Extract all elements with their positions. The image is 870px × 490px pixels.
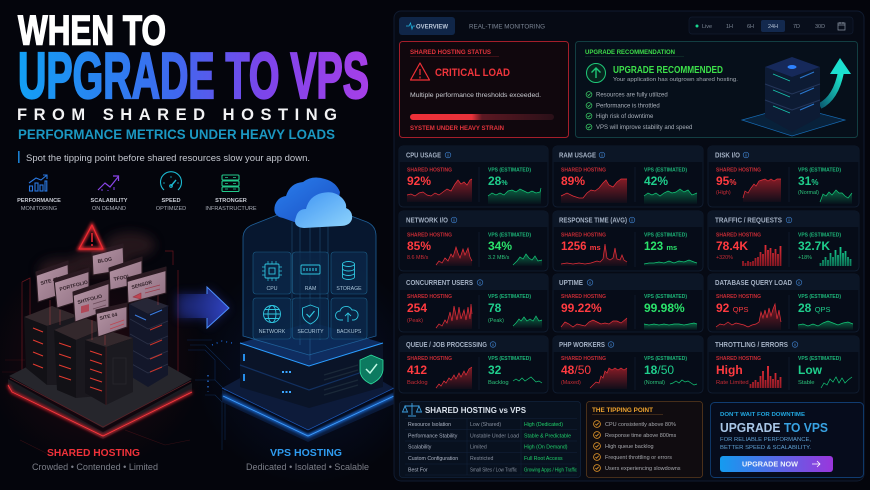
comparison table: Custom Configuration (408, 456, 458, 462)
card: disk i/o: 95% (716, 174, 736, 188)
label: vps hosting: Dedicated • Isolated • Scalable (246, 462, 369, 472)
comparison table: Limited (470, 444, 487, 450)
comparison table: Unstable Under Load (470, 434, 519, 440)
card: uptime (553, 274, 703, 332)
card: traffic / requests: TRAFFIC / REQUESTS (715, 216, 782, 224)
card: database query load (708, 274, 859, 332)
card: cpu usage: 28% (488, 174, 508, 188)
dashboard panel (394, 11, 864, 481)
panel: upgrade recommendation: Your application has outgrown shared hosting. (613, 77, 738, 83)
card: queue / job processing: Backlog (488, 380, 509, 386)
tab: real-time monitoring: REAL-TIME MONITORING (469, 24, 545, 30)
panel: call to action: UPGRADE TO VPS (720, 420, 828, 435)
card: traffic / requests: 78.4K (716, 239, 748, 253)
arrow: shared to vps (177, 287, 229, 328)
card: cpu usage: 92% (407, 174, 431, 188)
time range selector: Live (702, 24, 712, 30)
button: upgrade now (720, 456, 833, 472)
card: database query load: 28 QPS (798, 301, 831, 315)
icon: scales (402, 403, 422, 416)
time range selector: 30D (815, 24, 825, 30)
card: database query load: VPS (ESTIMATED) (798, 294, 841, 300)
time range selector: 1H (726, 24, 733, 30)
connector lines (50, 280, 158, 345)
comparison table: Performance Stability (408, 434, 458, 440)
card: ram usage: VPS (ESTIMATED) (644, 168, 687, 174)
resource labels: SECURITY (297, 329, 324, 335)
resource cards (253, 252, 367, 339)
icon: security (302, 305, 318, 324)
card: network i/o: 34% (488, 239, 512, 253)
card: ram usage: RAM USAGE (559, 150, 596, 160)
card: concurrent users: 78 (488, 301, 502, 315)
card: network i/o: VPS (ESTIMATED) (488, 232, 531, 238)
card: disk i/o: SHARED HOSTING (716, 168, 761, 174)
tower 4 blue stacked (129, 298, 169, 387)
tower 2 (54, 318, 110, 398)
resource labels: STORAGE (336, 286, 362, 292)
card: response time: VPS (ESTIMATED) (644, 232, 687, 238)
comparison table: Low (Shared) (470, 422, 501, 428)
card: traffic / requests: 32.7K (798, 239, 830, 253)
feature: speed (156, 172, 186, 212)
panel: shared hosting status: CRITICAL LOAD (435, 67, 510, 79)
card: throttling / errors: High (716, 363, 743, 377)
card: disk i/o: DISK I/O (715, 150, 740, 160)
icon: warning triangle (79, 225, 103, 249)
panel: the tipping point: THE TIPPING POINT (592, 407, 653, 414)
time range selector: 7D (793, 24, 800, 30)
checklist: High queue backlog (605, 444, 654, 450)
shared hosting server illustration (8, 225, 192, 439)
subtitle: from shared hosting: FROM SHARED HOSTING (17, 106, 337, 124)
card: network i/o: SHARED HOSTING (407, 232, 452, 238)
card: throttling / errors: VPS (ESTIMATED) (798, 356, 841, 362)
card: cpu usage (399, 146, 548, 207)
comparison table: Scalability (408, 444, 432, 450)
card: ram usage (553, 146, 703, 207)
card: php workers: (Normal) (644, 380, 665, 386)
checklist: Performance is throttled (596, 104, 660, 110)
card: ram usage: SHARED HOSTING (561, 168, 606, 174)
panel: upgrade recommendation: UPGRADE RECOMMENDED (613, 65, 723, 76)
label: shared hosting: Crowded • Contended • Limited (32, 462, 158, 472)
card: php workers: SHARED HOSTING (561, 356, 606, 362)
card: disk i/o: VPS (ESTIMATED) (798, 168, 841, 174)
progress bar (410, 114, 554, 120)
card: concurrent users: 254 (407, 301, 427, 315)
card: concurrent users: (Peak) (488, 318, 504, 324)
icon: server stack (222, 175, 239, 192)
feature: scalability: SCALABILITY (91, 198, 128, 204)
card: throttling / errors: Rate Limited (716, 380, 749, 386)
panel: shared hosting vs vps: SHARED HOSTING vs VPS (425, 405, 526, 415)
card: php workers: (Maxed) (561, 380, 581, 386)
card: traffic / requests: VPS (ESTIMATED) (798, 232, 841, 238)
panel: shared hosting status: Multiple performance thresholds exceeded. (410, 92, 541, 99)
card: php workers: VPS (ESTIMATED) (644, 356, 687, 362)
icon: rising arrow (98, 176, 118, 191)
card: database query load: 92 QPS (716, 301, 749, 315)
comparison table: Best For (408, 468, 428, 474)
card: response time: SHARED HOSTING (561, 232, 606, 238)
card: concurrent users: CONCURRENT USERS (406, 278, 473, 287)
checklist: Frequent throttling or errors (605, 455, 672, 461)
website windows: SENSOR (131, 280, 153, 291)
checklist: Users experiencing slowdowns (605, 466, 681, 472)
card: queue / job processing: VPS (ESTIMATED) (488, 356, 531, 362)
panel: shared hosting status: SYSTEM UNDER HEAVY STRAIN (410, 126, 504, 132)
title: when to: WHEN TO (18, 6, 166, 54)
title: upgrade to vps: UPGRADE TO VPS (18, 40, 369, 112)
card: response time: 123 ms (644, 241, 677, 253)
resource labels: CPU (267, 286, 278, 292)
card: queue / job processing (399, 336, 548, 393)
server stack illustration (742, 57, 851, 136)
server box (240, 322, 383, 408)
platform (222, 366, 394, 442)
tab: overview: OVERVIEW (416, 24, 449, 30)
card: cpu usage: SHARED HOSTING (407, 168, 452, 174)
icon: bar chart trend (29, 175, 47, 191)
card: network i/o (399, 211, 548, 271)
checklist (586, 92, 692, 131)
card: database query load: DATABASE QUERY LOAD (715, 278, 792, 287)
icon: network (264, 306, 280, 322)
feature: infrastructure: INFRASTRUCTURE (205, 206, 257, 212)
tab: overview (399, 17, 455, 35)
card: disk i/o: (Normal) (798, 190, 819, 196)
panel: call to action: DON'T WAIT FOR DOWNTIME (720, 412, 805, 418)
tower 1 (24, 306, 78, 385)
label: vps hosting: VPS HOSTING (270, 447, 342, 459)
comparison table: High (Dedicated) (524, 422, 563, 428)
panel: call to action: BETTER SPEED & SCALABILITY. (720, 445, 811, 451)
website windows: SITE 04 (99, 312, 118, 322)
card: disk i/o: 31% (798, 174, 818, 188)
glass panel (243, 210, 376, 360)
card: php workers (553, 336, 703, 393)
time range selector: 6H (747, 24, 754, 30)
comparison table (405, 418, 577, 475)
subtitle: performance metrics: PERFORMANCE METRICS UNDER HEAVY LOADS (18, 127, 335, 142)
feature: scalability (91, 176, 128, 212)
card: concurrent users (399, 274, 548, 332)
checklist: High risk of downtime (596, 114, 654, 120)
ghost enclosure outline (22, 251, 178, 380)
card: ram usage: 42% (644, 174, 668, 188)
card: throttling / errors: THROTTLING / ERRORS (715, 340, 788, 349)
card: concurrent users: VPS (ESTIMATED) (488, 294, 531, 300)
comparison table: Restricted (470, 456, 493, 462)
card: concurrent users: (Peak) (407, 318, 423, 324)
card: queue / job processing: 412 (407, 363, 427, 377)
card: php workers: PHP WORKERS (559, 340, 605, 349)
card: network i/o: 85% (407, 239, 431, 253)
feature: infrastructure (205, 175, 257, 212)
checklist: Resources are fully utilized (596, 92, 668, 98)
icon: warning (410, 63, 430, 80)
panel: upgrade recommendation (576, 42, 858, 138)
icon: cpu (262, 261, 282, 281)
label: shared hosting: SHARED HOSTING (47, 447, 140, 459)
card: php workers: 18/50 (644, 363, 674, 377)
panel: call to action: FOR RELIABLE PERFORMANCE, (720, 437, 811, 443)
card: queue / job processing: Backlog (407, 380, 428, 386)
feature: performance monitoring (17, 175, 61, 212)
comparison table: Stable & Predictable (524, 434, 571, 440)
card: throttling / errors (708, 336, 859, 393)
website windows: PORTFOLIO (59, 280, 89, 293)
resource labels: BACKUPS (337, 329, 362, 335)
icon: storage (342, 262, 354, 280)
comparison table: High (On Demand) (524, 444, 568, 450)
icon: ram (301, 265, 320, 274)
circuit traces (2, 340, 232, 455)
website windows: SHTFOLIO (77, 294, 103, 306)
card: uptime: SHARED HOSTING (561, 294, 606, 300)
feature: speed: OPTIMIZED (156, 206, 186, 212)
card: throttling / errors: SHARED HOSTING (716, 356, 761, 362)
card: network i/o: 3.2 MB/s (488, 255, 510, 261)
icon: gauge (160, 172, 182, 190)
icon: green shield (360, 355, 383, 384)
card: network i/o: NETWORK I/O (406, 216, 448, 224)
time range selector: 24H (768, 24, 778, 30)
card: throttling / errors: Stable (798, 380, 814, 386)
card: disk i/o: (High) (716, 190, 731, 196)
panel: shared hosting vs vps (400, 402, 580, 478)
icon: backups (336, 306, 358, 322)
website windows: SITE 42 (40, 276, 59, 287)
panel: upgrade recommendation: UPGRADE RECOMMENDATION (585, 49, 676, 56)
icon: up arrow (586, 64, 606, 82)
comparison table: Full Root Access (524, 456, 563, 462)
card: traffic / requests: +320% (716, 255, 733, 261)
card: traffic / requests (708, 211, 859, 271)
card: ram usage: 89% (561, 174, 585, 188)
card: cpu usage: CPU USAGE (406, 150, 441, 160)
card: database query load: SHARED HOSTING (716, 294, 761, 300)
card: uptime: UPTIME (559, 278, 583, 287)
resource labels (259, 286, 362, 335)
comparison table: Resource Isolation (408, 422, 451, 428)
checklist (594, 421, 681, 472)
resource labels: RAM (305, 286, 316, 292)
card: queue / job processing: SHARED HOSTING (407, 356, 452, 362)
card: response time (553, 211, 703, 271)
card: queue / job processing: 32 (488, 363, 502, 377)
feature: infrastructure: STRONGER (215, 198, 247, 204)
panel: shared hosting status: SHARED HOSTING STATUS (410, 49, 491, 56)
tower 3 (85, 332, 133, 405)
resource labels: NETWORK (259, 329, 286, 335)
card: traffic / requests: +18% (798, 255, 812, 261)
card: cpu usage: VPS (ESTIMATED) (488, 168, 531, 174)
platform (8, 350, 192, 439)
panel: the tipping point (586, 402, 702, 478)
label: vps hosting (246, 447, 369, 472)
card: throttling / errors: Low (798, 363, 823, 377)
checklist: Response time above 800ms (605, 433, 676, 439)
card: php workers: 48/50 (561, 363, 591, 377)
vps hosting illustration (222, 178, 394, 442)
comparison table: Small Sites / Low Traffic (470, 468, 517, 474)
feature: scalability: ON DEMAND (92, 206, 126, 212)
card: uptime: 99.22% (561, 301, 602, 315)
cloud (274, 178, 352, 228)
card: uptime: 99.98% (644, 301, 685, 315)
checklist: VPS will improve stability and speed (596, 125, 692, 131)
card: network i/o: 8.6 MB/s (407, 255, 429, 261)
card: disk i/o (708, 146, 859, 207)
website windows: TFOOL (113, 274, 131, 283)
card: uptime: VPS (ESTIMATED) (644, 294, 687, 300)
time range selector (689, 17, 853, 34)
label: shared hosting (32, 447, 158, 472)
panel: shared hosting status (400, 42, 568, 138)
feature: performance monitoring: MONITORING (21, 206, 57, 212)
tagline: Spot the tipping point before shared resources slow your app down. (26, 152, 310, 163)
icon: calendar (838, 22, 845, 30)
card: response time: RESPONSE TIME (AVG) (559, 216, 628, 224)
background glows (0, 250, 425, 485)
card: concurrent users: SHARED HOSTING (407, 294, 452, 300)
website windows (36, 244, 166, 337)
card: queue / job processing: QUEUE / JOB PROCESSING (406, 340, 487, 349)
feature: speed: SPEED (162, 198, 180, 204)
card: response time: 1256 ms (561, 241, 601, 253)
button: upgrade now: UPGRADE NOW (742, 462, 798, 468)
feature: performance monitoring: PERFORMANCE (17, 198, 61, 204)
checklist: CPU consistently above 80% (605, 422, 676, 428)
comparison table: Growing Apps / High Traffic (524, 468, 577, 474)
panel: call to action (710, 402, 864, 478)
smoke (38, 232, 155, 282)
card: traffic / requests: SHARED HOSTING (716, 232, 761, 238)
website windows: BLOG (97, 257, 113, 265)
